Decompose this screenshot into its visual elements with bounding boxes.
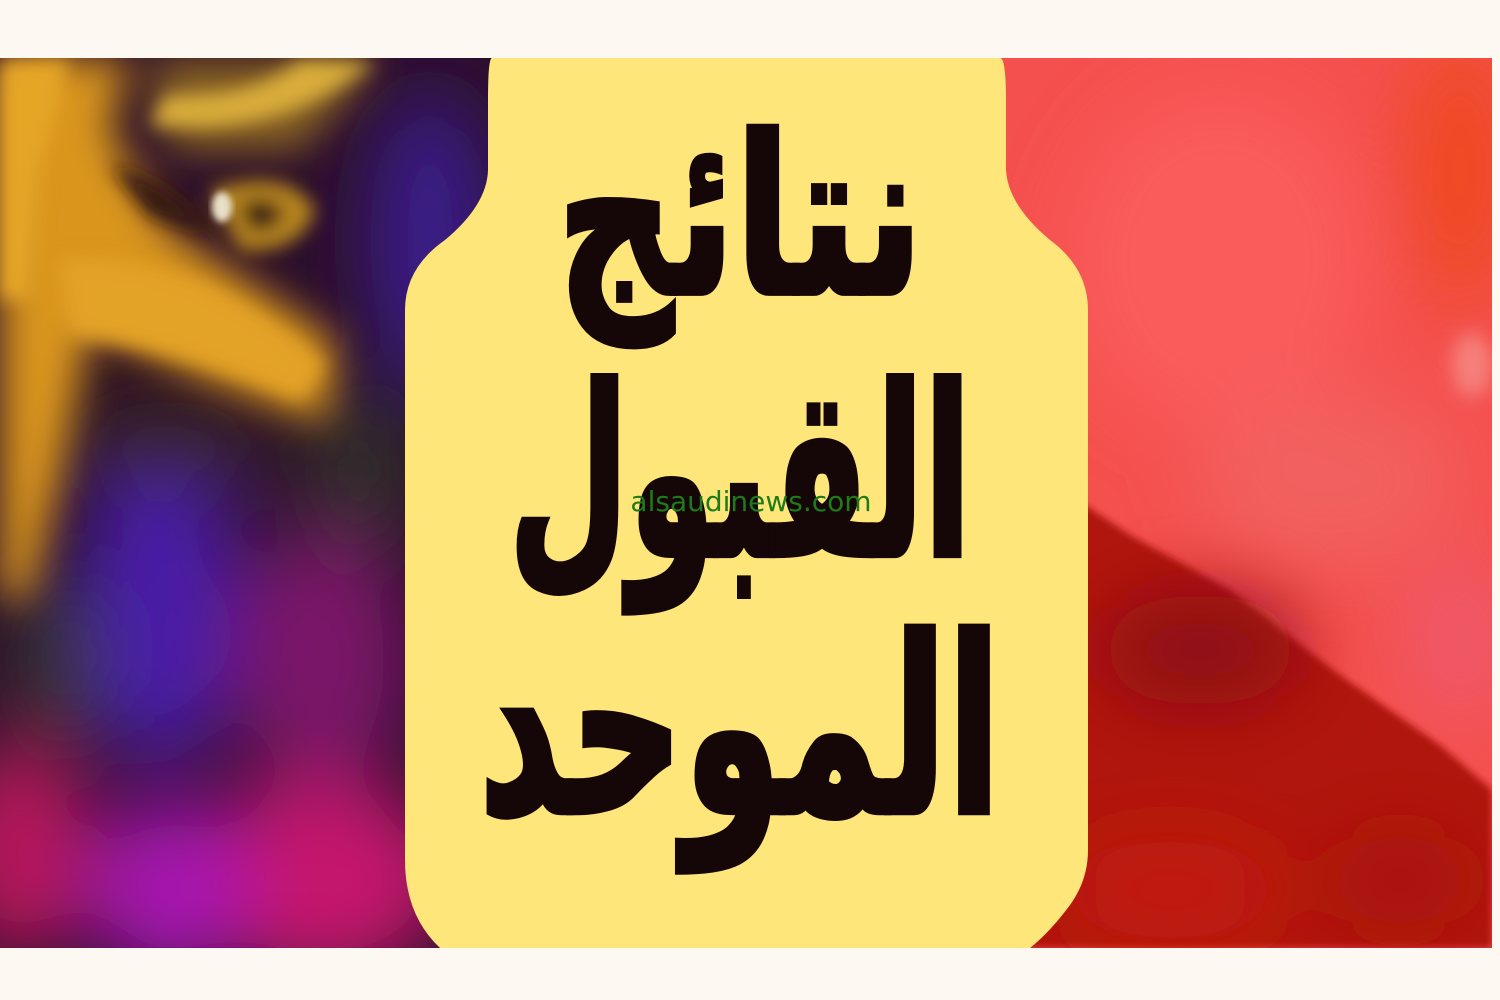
panel: yellow jar-shaped label [405, 58, 1088, 948]
panel: left blurred photo [0, 58, 520, 980]
earring highlight [212, 192, 232, 222]
panel: right blurred photo [1000, 30, 1500, 948]
highlight on fabric [1452, 333, 1492, 397]
title line 2: القبول [509, 337, 971, 612]
title line 1: نتائج [557, 91, 923, 348]
watermark: alsaudinews.com [630, 485, 872, 518]
title line 3: الموحد [479, 588, 1001, 871]
title: three-line Arabic heading [479, 91, 1001, 871]
dark red fabric [1000, 505, 1492, 948]
